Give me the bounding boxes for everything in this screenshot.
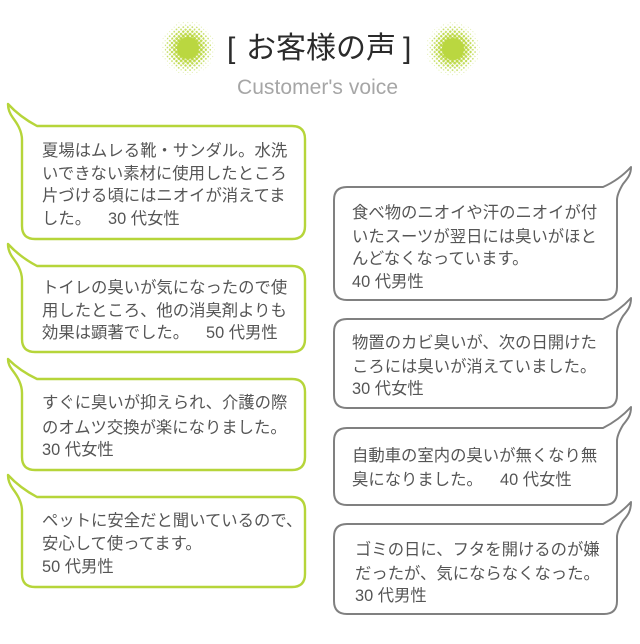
panel: customer voice 5 — [334, 167, 631, 300]
panel: customer voice 2 — [8, 244, 305, 352]
header — [161, 21, 480, 99]
text: voice 2: 用したところ、他の消臭剤よりも — [42, 302, 287, 320]
text: voice 6: 物置のカビ臭いが、次の日開けた — [352, 334, 597, 352]
subtitle: Customer's voice — [237, 76, 398, 99]
panel: customer voice 7 — [334, 407, 631, 505]
text: voice 8: 30 代男性 — [355, 587, 427, 605]
text: voice 3: すぐに臭いが抑えられ、介護の際 — [42, 394, 287, 412]
text: voice 2: トイレの臭いが気になったので使 — [42, 279, 287, 297]
text: voice 7: 40 代女性 — [500, 471, 572, 489]
text: voice 1: 片づける頃にはニオイが消えてま — [42, 187, 286, 205]
text: voice 1: 30 代女性 — [108, 210, 180, 228]
text: voice 8: だったが、気にならなくなった。 — [355, 565, 600, 583]
title: お客様の声 — [246, 32, 396, 65]
icon: left halftone circle — [161, 21, 215, 75]
text: voice 6: ころには臭いが消えていました。 — [352, 358, 596, 376]
panel: customer voice 8 — [334, 502, 631, 614]
title: ] — [403, 32, 411, 65]
text: voice 1: した。 — [42, 210, 91, 228]
text: voice 4: ペットに安全だと聞いているので、 — [42, 512, 302, 530]
text: voice 3: のオムツ交換が楽になりました。 — [42, 419, 287, 437]
text: voice 5: んどなくなっています。 — [352, 250, 529, 268]
text: voice 4: 安心して使ってます。 — [42, 535, 202, 553]
icon: right halftone circle — [426, 22, 480, 76]
text: voice 1: 夏場はムレる靴・サンダル。水洗 — [42, 142, 287, 160]
text: voice 2: 50 代男性 — [206, 324, 278, 342]
panel: customer voice 3 — [8, 359, 305, 470]
text: voice 5: 食べ物のニオイや汗のニオイが付 — [352, 204, 597, 222]
text: voice 2: 効果は顕著でした。 — [42, 324, 189, 342]
text: voice 4: 50 代男性 — [42, 558, 114, 576]
text: voice 5: 40 代男性 — [352, 273, 424, 291]
text: voice 7: 自動車の室内の臭いが無くなり無 — [352, 447, 597, 465]
panel: customer voice 6 — [334, 298, 631, 408]
panel: customer voice 4 — [8, 475, 305, 587]
text: voice 8: ゴミの日に、フタを開けるのが嫌 — [355, 540, 600, 559]
text: voice 1: いできない素材に使用したところ — [42, 165, 287, 183]
panel: customer voice 1 — [8, 104, 305, 239]
text: voice 5: いたスーツが翌日には臭いがほと — [352, 228, 597, 246]
text: voice 3: 30 代女性 — [42, 441, 114, 459]
text: voice 7: 臭になりました。 — [352, 471, 483, 489]
text: voice 6: 30 代女性 — [352, 380, 424, 398]
title: [ — [227, 32, 236, 65]
